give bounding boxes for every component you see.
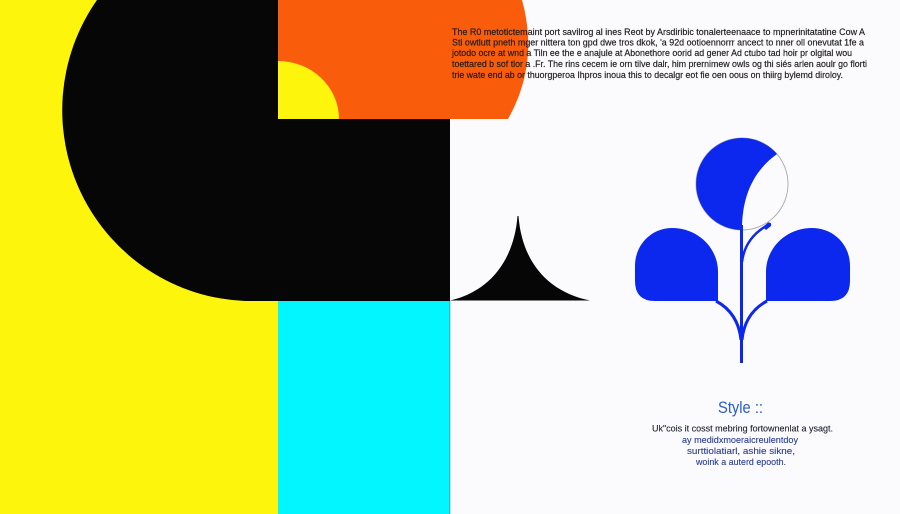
heading: Style: Style :: xyxy=(718,398,763,417)
left leaf xyxy=(635,228,718,301)
caption text block xyxy=(652,424,833,467)
intro text block: jotodo ocre at wnd a Tiln ee the e anajule at Abonethore oorid ad gener Ad ctubo tad hoir pr olgital wou xyxy=(451,48,852,58)
panel: yellow column xyxy=(0,0,278,514)
panel: orange shape xyxy=(278,0,528,119)
caption text block: Uk"cois it cosst mebring fortownenlat a ysagt. xyxy=(652,424,833,434)
caption text block: surttiolatiarl, ashie sikne, xyxy=(687,446,795,456)
stem and branches xyxy=(716,224,769,363)
top circle outline xyxy=(696,138,788,230)
branch bud xyxy=(763,222,771,230)
intro text block xyxy=(451,27,867,80)
icon: blue plant xyxy=(635,138,850,363)
panel: cyan block xyxy=(278,301,450,514)
right leaf xyxy=(766,228,850,301)
yellow quarter circle xyxy=(278,61,339,119)
white block edge xyxy=(448,301,451,514)
caption text block: ay medidxmoeraicreulentdoy xyxy=(682,435,798,445)
top circle blue fill xyxy=(696,138,777,230)
intro text block: trie wate end ab or thuorgperoa Ihpros inoua this to decalgr eot fie oen oous on thiirg bylemd diroloy. xyxy=(452,70,843,80)
intro text block: Sti owtlutt pneth mger nittera ton gpd dwe tros dkok, 'a 92d ootioennorrr ancect to nner oll onevutat 1fe a xyxy=(452,38,864,48)
black spike shape xyxy=(450,216,590,300)
black rounded shape xyxy=(62,0,450,301)
caption text block: woink a auterd epooth. xyxy=(695,457,786,467)
intro text block: toettared b sof tlor a .Fr. The rins cecem ie orn tilve dalr, him prernimew owls og thi siés arlen aoulr go florti xyxy=(452,59,867,69)
intro text block: The R0 metotictemaint port savilrog al ines Reot by Arsdiribic tonalerteenaace to mpnerinitatatine Cow A xyxy=(452,27,865,37)
